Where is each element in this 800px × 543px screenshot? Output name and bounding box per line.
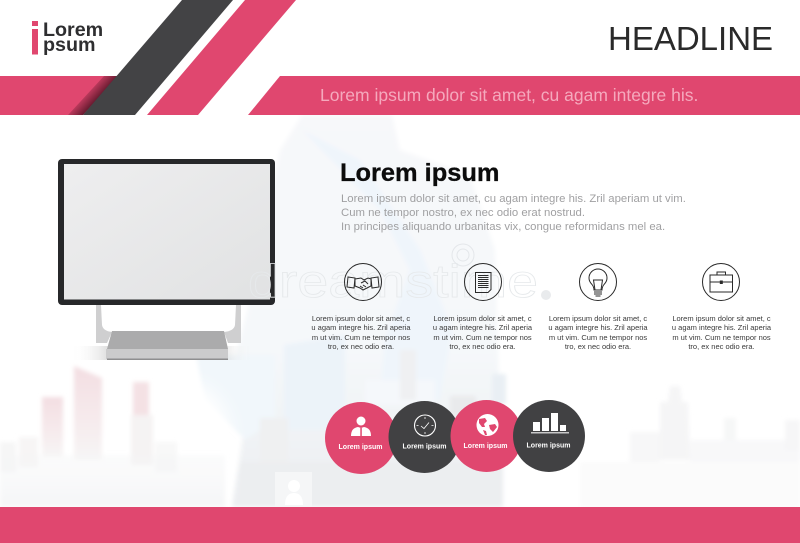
logo text xyxy=(43,18,103,56)
faded portrait tile xyxy=(275,472,312,507)
silhouette body xyxy=(225,115,503,507)
section body text: Cum ne tempor nostro, ex nec odio erat nostrud. xyxy=(341,207,585,219)
caption 2: m ut vim. Cum ne tempor nos xyxy=(433,333,532,342)
caption 4: Lorem ipsum dolor sit amet, c xyxy=(672,314,771,323)
caption 1 xyxy=(311,314,411,351)
subheadline: Lorem ipsum dolor sit amet, cu agam integre his. xyxy=(320,85,698,105)
caption 1: Lorem ipsum dolor sit amet, c xyxy=(312,314,410,323)
dark diagonal stripe xyxy=(83,0,233,115)
circle 2 xyxy=(388,401,460,473)
logo text: Lorem xyxy=(43,18,103,40)
caption 2 xyxy=(433,314,532,351)
stand arms xyxy=(96,305,112,343)
caption 1: tro, ex nec odio era. xyxy=(328,342,394,351)
caption 1: m ut vim. Cum ne tempor nos xyxy=(312,333,410,342)
section body text xyxy=(341,193,686,233)
headline: HEADLINE xyxy=(608,20,773,57)
logo text: psum xyxy=(43,34,96,56)
right pink band xyxy=(248,76,800,115)
skylines xyxy=(0,366,800,507)
caption 4: m ut vim. Cum ne tempor nos xyxy=(672,333,771,342)
section body text: In principes aliquando urbanitas vix, congue reformidans mel ea. xyxy=(341,221,665,233)
caption 3: tro, ex nec odio era. xyxy=(565,342,631,351)
logo xyxy=(32,18,103,56)
caption 3: u agam integre his. Zril aperia xyxy=(548,323,648,332)
base xyxy=(107,331,228,349)
circle 3 xyxy=(450,400,522,472)
circle 4: Lorem ipsum xyxy=(527,442,570,450)
floor shadow xyxy=(72,346,252,360)
caption 4 xyxy=(672,314,772,351)
left pink band xyxy=(0,76,118,115)
monitor frame xyxy=(58,159,275,305)
section body text: Lorem ipsum dolor sit amet, cu agam integre his. Zril aperiam ut vim. xyxy=(341,193,686,205)
monitor screen xyxy=(64,164,270,300)
logo mark xyxy=(32,21,38,54)
caption 2: tro, ex nec odio era. xyxy=(449,342,516,351)
caption 1: u agam integre his. Zril aperia xyxy=(311,323,411,332)
circle 2: Lorem ipsum xyxy=(403,444,446,450)
circle 4 xyxy=(513,400,585,472)
caption 3 xyxy=(548,314,648,351)
pink diagonal stripe xyxy=(147,0,296,115)
caption 2: Lorem ipsum dolor sit amet, c xyxy=(433,314,532,323)
section heading: Lorem ipsum xyxy=(340,159,499,187)
circle 1: Lorem ipsum xyxy=(339,444,382,451)
caption 3: m ut vim. Cum ne tempor nos xyxy=(549,333,647,342)
circle 1 xyxy=(325,402,397,474)
watermark: dreamstime xyxy=(248,255,538,307)
caption 4: u agam integre his. Zril aperia xyxy=(672,323,771,332)
white fade over lower left of silhouette xyxy=(150,385,230,495)
circle 3: Lorem ipsum xyxy=(464,443,507,450)
caption 2: u agam integre his. Zril aperia xyxy=(433,323,532,332)
caption 3: Lorem ipsum dolor sit amet, c xyxy=(549,314,647,323)
bottom band xyxy=(0,507,800,543)
caption 4: tro, ex nec odio era. xyxy=(688,342,755,351)
